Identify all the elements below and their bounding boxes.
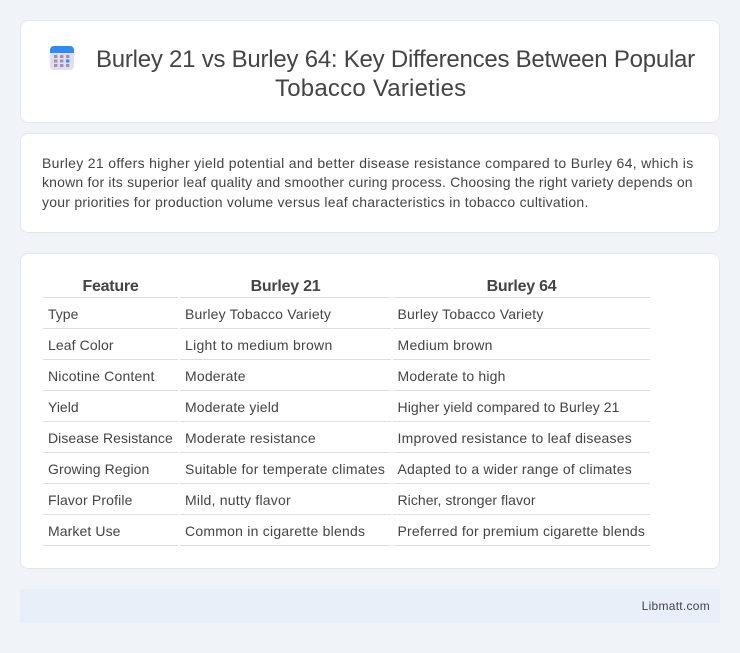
row: type: Burley Tobacco Variety bbox=[398, 306, 544, 322]
row: disease resistance bbox=[48, 430, 632, 446]
row: flavor profile: Flavor Profile bbox=[48, 492, 133, 508]
title: Tobacco Varieties bbox=[275, 74, 466, 102]
row: yield: Moderate yield bbox=[185, 399, 279, 415]
panel: summary bbox=[20, 133, 720, 233]
row: yield: Higher yield compared to Burley 21 bbox=[398, 399, 620, 415]
summary text: Burley 21 offers higher yield potential and better disease resistance compared to Burley 64, which is bbox=[42, 155, 694, 171]
row: type: Type bbox=[48, 306, 78, 322]
title: Burley 21 vs Burley 64: Key Differences Between Popular bbox=[96, 46, 695, 73]
footer text: Libmatt.com bbox=[642, 599, 710, 613]
row: market use: Preferred for premium cigarette blends bbox=[398, 523, 645, 539]
row: type: Burley Tobacco Variety bbox=[185, 306, 331, 322]
row: yield bbox=[48, 399, 620, 415]
row: flavor profile: Mild, nutty flavor bbox=[185, 492, 291, 508]
panel: title card bbox=[20, 20, 720, 123]
panel: comparison table bbox=[20, 253, 720, 569]
row: disease resistance: Improved resistance to leaf diseases bbox=[398, 430, 632, 446]
summary text: your priorities for production volume versus leaf characteristics in tobacco cultivation. bbox=[42, 194, 589, 210]
row: nicotine content: Nicotine Content bbox=[48, 368, 155, 384]
row: market use: Market Use bbox=[48, 523, 121, 539]
row: nicotine content: Moderate bbox=[185, 368, 246, 384]
row: leaf color: Medium brown bbox=[398, 337, 493, 353]
header: burley 64: Burley 64 bbox=[487, 278, 556, 295]
row: disease resistance: Moderate resistance bbox=[185, 430, 316, 446]
footer bar bbox=[20, 589, 720, 623]
row: disease resistance: Disease Resistance bbox=[48, 430, 173, 446]
row: leaf color: Light to medium brown bbox=[185, 337, 333, 353]
row: flavor profile bbox=[48, 492, 536, 508]
row: growing region: Suitable for temperate climates bbox=[185, 461, 385, 477]
header: burley 21: Burley 21 bbox=[251, 278, 320, 295]
row: growing region: Adapted to a wider range of climates bbox=[398, 461, 632, 477]
comparison table bbox=[43, 278, 650, 546]
row: growing region: Growing Region bbox=[48, 461, 149, 477]
row: market use bbox=[48, 523, 645, 539]
header: feature: Feature bbox=[82, 278, 139, 295]
icon: calendar bbox=[50, 46, 74, 70]
row: growing region bbox=[48, 461, 632, 477]
summary text: known for its superior leaf quality and smoother curing process. Choosing the right variety depends on bbox=[42, 174, 693, 190]
row: market use: Common in cigarette blends bbox=[185, 523, 365, 539]
row: leaf color: Leaf Color bbox=[48, 337, 114, 353]
row: yield: Yield bbox=[48, 399, 79, 415]
summary text bbox=[42, 155, 694, 210]
title bbox=[96, 46, 695, 102]
row: nicotine content: Moderate to high bbox=[398, 368, 506, 384]
row: type bbox=[48, 306, 544, 322]
row: nicotine content bbox=[48, 368, 506, 384]
row: leaf color bbox=[48, 337, 493, 353]
row: flavor profile: Richer, stronger flavor bbox=[398, 492, 536, 508]
